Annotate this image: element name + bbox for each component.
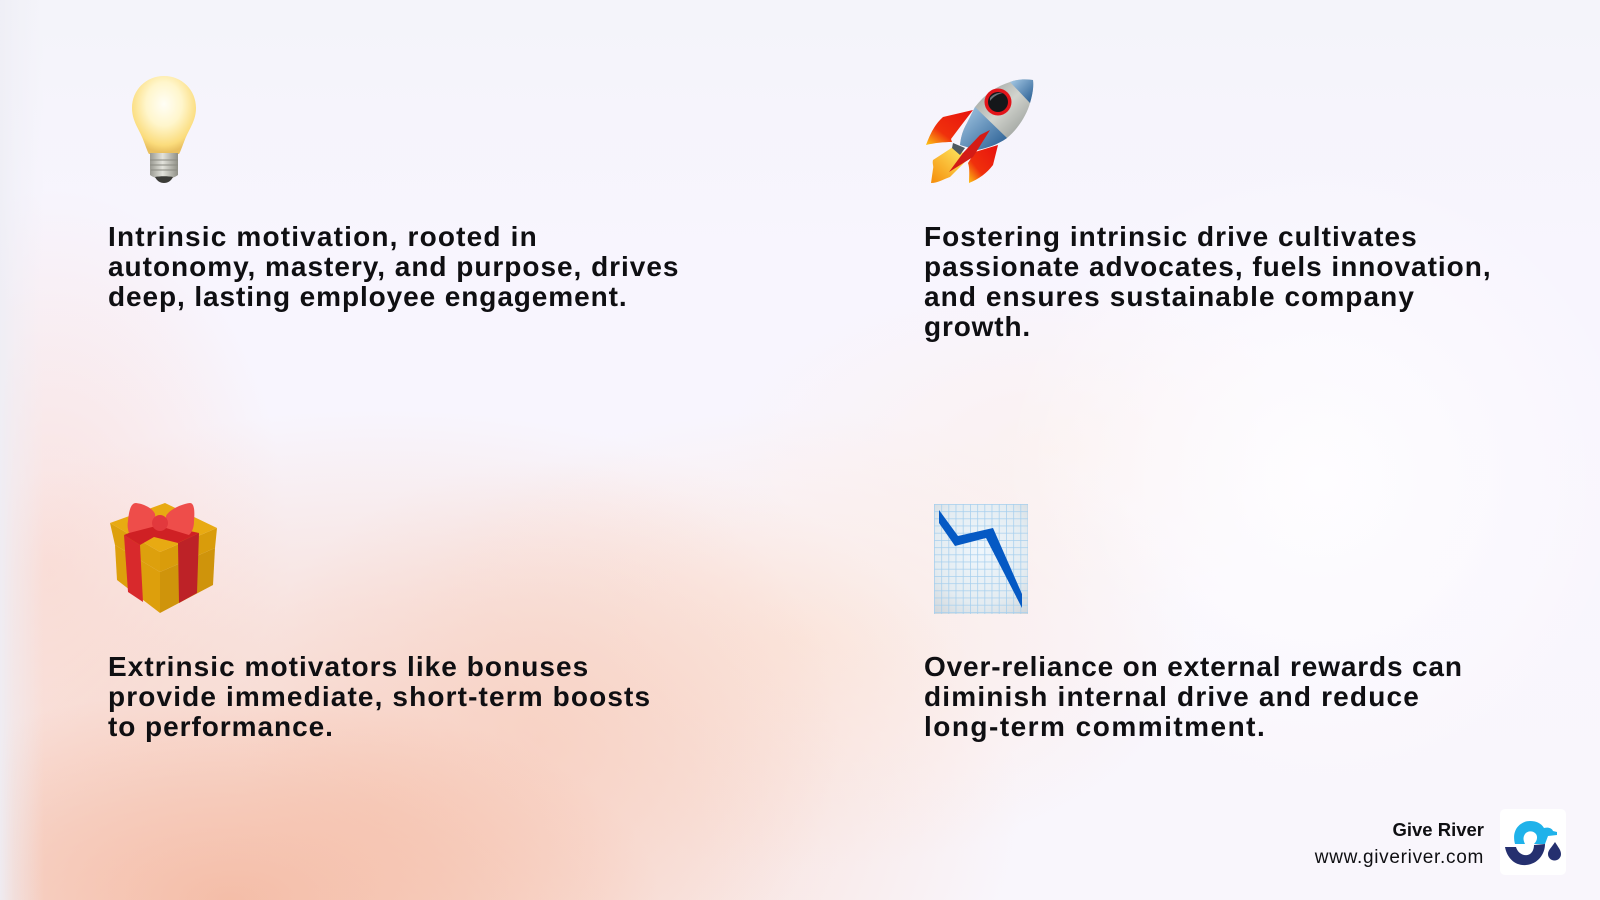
text: over-reliance: diminish internal drive and reduce [924, 681, 1420, 712]
text: over-reliance: Over-reliance on external rewards can [924, 651, 1463, 682]
text: fostering intrinsic drive [924, 221, 1492, 342]
icon: gift box [110, 503, 217, 613]
text: fostering intrinsic drive: growth. [924, 311, 1031, 342]
text: fostering intrinsic drive: and ensures sustainable company [924, 281, 1415, 312]
text: extrinsic motivators: Extrinsic motivators like bonuses [108, 651, 589, 682]
text: extrinsic motivators [108, 651, 651, 742]
brand footer [1314, 809, 1566, 875]
text: extrinsic motivators: provide immediate, short-term boosts [108, 681, 651, 712]
icon: light bulb [132, 76, 196, 183]
panel: over-reliance [924, 504, 1463, 742]
brand url: www.giveriver.com [1315, 847, 1484, 868]
text: over-reliance [924, 651, 1463, 742]
icon: falling chart [934, 504, 1028, 614]
brand name: Give River [1392, 819, 1484, 840]
panel: extrinsic motivators [108, 503, 651, 742]
text: fostering intrinsic drive: Fostering intrinsic drive cultivates [924, 221, 1418, 252]
text: intrinsic motivation [108, 221, 679, 312]
text: extrinsic motivators: to performance. [108, 711, 334, 742]
panel: intrinsic motivation [108, 76, 679, 312]
text: intrinsic motivation: Intrinsic motivation, rooted in [108, 221, 538, 252]
icon: rocket [926, 79, 1034, 183]
text: intrinsic motivation: deep, lasting employee engagement. [108, 281, 628, 312]
panel: fostering intrinsic drive [924, 79, 1492, 342]
text: fostering intrinsic drive: passionate advocates, fuels innovation, [924, 251, 1492, 282]
logo [1500, 809, 1566, 875]
text: over-reliance: long-term commitment. [924, 711, 1266, 742]
text: intrinsic motivation: autonomy, mastery, and purpose, drives [108, 251, 679, 282]
